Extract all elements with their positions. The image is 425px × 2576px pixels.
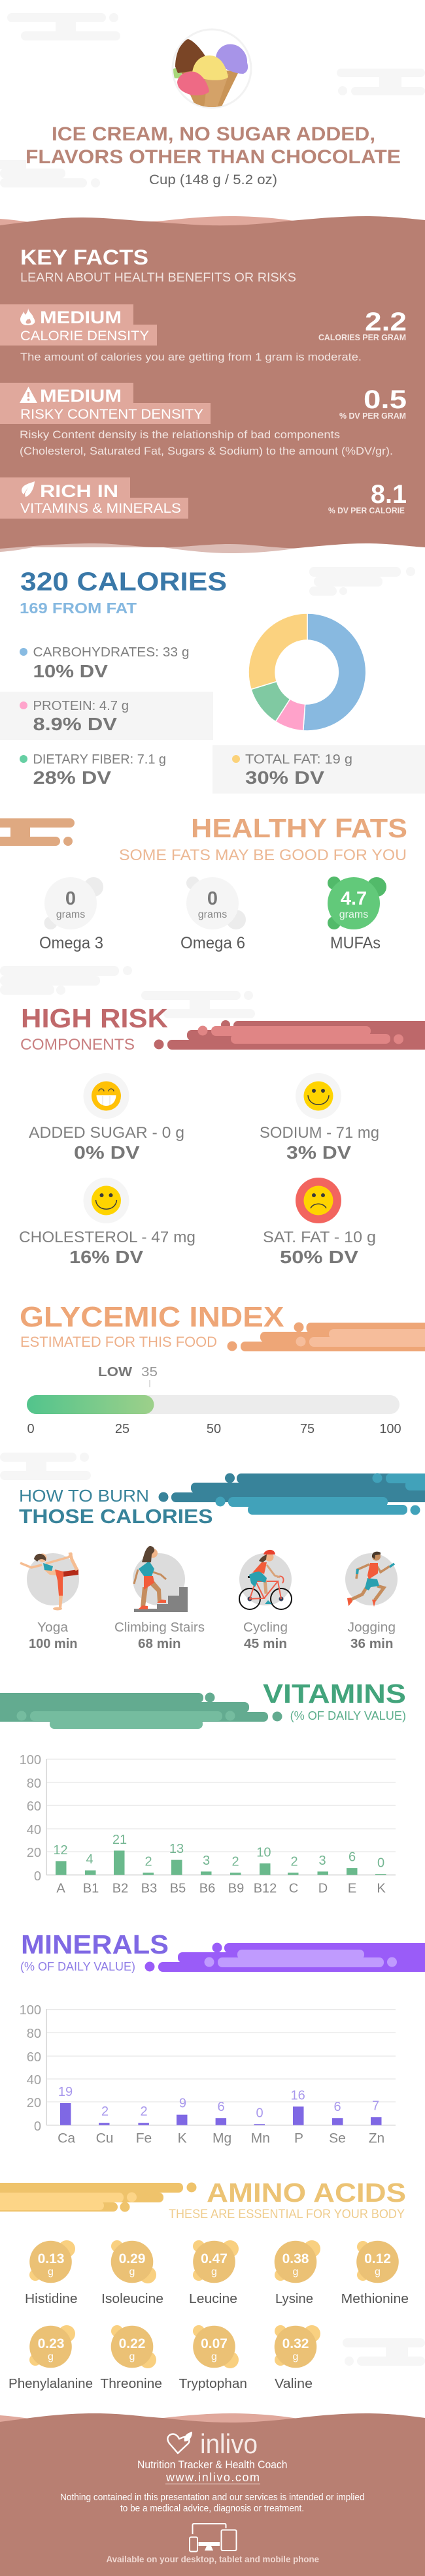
macro: dietary fiber: 28% DV — [33, 767, 111, 788]
exercise: climbing stairs — [114, 1546, 205, 1651]
bar chart: vitamins: B6 — [199, 1882, 215, 1896]
gauge: glycemic index bar: 0 — [27, 1422, 35, 1436]
metric: dv per gram: % DV PER GRAM — [339, 411, 406, 421]
description: risky content: Risky Content density is the relationship of bad components — [20, 428, 340, 441]
amino: phenylalanine — [8, 2325, 93, 2391]
exercise: jogging — [345, 1552, 398, 1651]
bar chart: vitamins: 40 — [27, 1823, 41, 1837]
amino: leucine: 0.47 — [201, 2251, 228, 2266]
icon: glycemic cloud — [228, 1322, 425, 1351]
heading: vitamins: VITAMINS — [263, 1679, 406, 1709]
bar chart: minerals: 9 — [179, 2097, 186, 2111]
amino: lysine — [275, 2240, 320, 2306]
bar chart: vitamins: B12 — [254, 1882, 277, 1896]
macro: total fat — [212, 745, 425, 794]
heading: glycemic index: GLYCEMIC INDEX — [20, 1301, 284, 1333]
amino: histidine: g — [48, 2266, 54, 2278]
bar chart: vitamins: B9 — [228, 1882, 244, 1896]
exercise: cycling: Cycling — [243, 1620, 288, 1635]
bar chart: vitamins: 100 — [20, 1753, 41, 1767]
bar chart: vitamins: 3 — [203, 1854, 210, 1868]
icon: minerals cloud — [145, 1942, 425, 1972]
amino: methionine — [341, 2241, 409, 2306]
badge: vitamins and minerals: VITAMINS & MINERALS — [20, 501, 181, 516]
badge: vitamins and minerals — [0, 477, 188, 519]
description: risky content — [20, 428, 393, 457]
component: added sugar — [29, 1073, 184, 1163]
badge: risky content density: RISKY CONTENT DENSITY — [20, 407, 203, 422]
icon: sad face — [303, 1186, 333, 1215]
component: added sugar: ADDED SUGAR - 0 g — [29, 1124, 184, 1142]
icon: grinning face — [92, 1082, 121, 1110]
amino: histidine: 0.13 — [38, 2251, 64, 2266]
fat: omega 6 — [180, 877, 246, 952]
gauge: glycemic index bar: 35 — [141, 1365, 158, 1379]
bar chart: vitamins: E — [348, 1882, 356, 1896]
amino: methionine: 0.12 — [364, 2251, 391, 2266]
website link: www.inlivo.com — [165, 2471, 260, 2484]
heading: healthy fats: HEALTHY FATS — [191, 813, 407, 843]
disclaimer: to be a medical advice, diagnosis or treatment. — [120, 2504, 304, 2514]
fat: omega 3: 0 — [65, 888, 76, 909]
amino: isoleucine — [101, 2240, 163, 2306]
bar chart: vitamins: 4 — [86, 1852, 94, 1867]
macro: protein: PROTEIN: 4.7 g — [33, 699, 129, 713]
bar chart: minerals: 6 — [217, 2100, 225, 2114]
amino: leucine — [189, 2240, 239, 2306]
amino: isoleucine: 0.29 — [119, 2251, 145, 2266]
subheading: vitamins daily value: (% OF DAILY VALUE) — [290, 1709, 406, 1722]
gauge: glycemic index bar: 50 — [207, 1422, 221, 1436]
amino: threonine — [100, 2325, 162, 2391]
icon: smiling face — [303, 1082, 333, 1110]
bar chart: minerals: Cu — [96, 2131, 113, 2146]
amino: histidine: Histidine — [25, 2292, 77, 2306]
bar chart: vitamins: 10 — [256, 1846, 271, 1860]
amino: leucine: Leucine — [189, 2292, 237, 2306]
component: cholesterol: 16% DV — [69, 1247, 143, 1267]
bar chart: vitamins: C — [289, 1882, 298, 1896]
subheading: components: COMPONENTS — [20, 1036, 135, 1054]
amino: tryptophan — [179, 2325, 247, 2391]
bar chart: vitamins: B3 — [141, 1882, 157, 1896]
heading: amino acids: AMINO ACIDS — [207, 2178, 406, 2208]
icon: devices — [190, 2524, 237, 2551]
subheading: minerals daily value: (% OF DAILY VALUE) — [20, 1960, 135, 1973]
disclaimer — [60, 2492, 365, 2514]
bar chart: vitamins: B5 — [170, 1882, 186, 1896]
bar chart: minerals: 6 — [333, 2100, 341, 2114]
fat: omega 6: 0 — [207, 888, 218, 909]
icon: leaf — [22, 481, 35, 497]
heading: how to burn those calories: HOW TO BURN — [19, 1486, 149, 1505]
amino: methionine: Methionine — [341, 2292, 409, 2306]
icon: high risk cloud — [154, 1020, 425, 1050]
bar chart: vitamins: 2 — [231, 1855, 239, 1869]
bar chart: vitamins: 20 — [27, 1846, 41, 1860]
metric: dv per calorie — [328, 480, 407, 515]
metric: dv per gram: 0.5 — [364, 385, 407, 414]
bar chart: minerals: 40 — [27, 2073, 41, 2087]
bar chart: minerals: 20 — [27, 2096, 41, 2110]
bar chart: minerals: Mg — [212, 2131, 231, 2146]
subheading: amino acids: THESE ARE ESSENTIAL FOR YOUR BODY — [169, 2208, 405, 2221]
donut chart — [248, 613, 366, 731]
component: sodium: SODIUM - 71 mg — [260, 1124, 379, 1142]
amino: threonine: g — [129, 2351, 135, 2362]
fat: omega 3 — [39, 877, 103, 952]
bar chart: vitamins: A — [56, 1882, 65, 1896]
bar chart: minerals — [20, 2003, 396, 2146]
macro: carbohydrates — [20, 645, 190, 681]
amino: threonine: 0.22 — [119, 2336, 145, 2351]
bar chart: vitamins: 21 — [112, 1833, 127, 1847]
icon: yoga figure — [20, 1553, 78, 1611]
bar chart: minerals: 2 — [140, 2104, 148, 2119]
tagline: Nutrition Tracker & Health Coach — [137, 2458, 288, 2471]
heading: how to burn those calories: THOSE CALORIES — [19, 1505, 213, 1528]
fat: omega 6: grams — [198, 909, 227, 920]
bar chart: vitamins: 12 — [53, 1843, 68, 1858]
heading: how to burn those calories — [19, 1486, 213, 1528]
macro: carbohydrates: 10% DV — [33, 661, 108, 681]
bar chart: vitamins: 0 — [34, 1869, 41, 1884]
fat: omega 3: Omega 3 — [39, 934, 103, 952]
component: cholesterol — [19, 1178, 196, 1267]
amino: lysine: g — [293, 2266, 298, 2278]
exercise: jogging: Jogging — [348, 1620, 396, 1635]
amino: methionine: g — [375, 2266, 381, 2278]
amino: threonine: Threonine — [100, 2377, 162, 2391]
amino: phenylalanine: g — [48, 2351, 54, 2362]
bar chart: minerals: 2 — [101, 2104, 109, 2119]
bar chart: vitamins: B1 — [83, 1882, 99, 1896]
amino: leucine: g — [211, 2266, 217, 2278]
gauge: glycemic index bar: LOW — [98, 1365, 132, 1379]
bar chart: minerals: Ca — [58, 2131, 75, 2146]
gauge: glycemic index bar: 25 — [115, 1422, 129, 1436]
metric: dv per calorie: 8.1 — [371, 480, 407, 509]
macro: dietary fiber: DIETARY FIBER: 7.1 g — [33, 752, 166, 767]
fat: mufas: grams — [339, 909, 368, 920]
heading: minerals: MINERALS — [21, 1929, 169, 1959]
exercise: cycling: 45 min — [244, 1637, 287, 1651]
bar chart: minerals: 80 — [27, 2027, 41, 2041]
macro: carbohydrates: CARBOHYDRATES: 33 g — [33, 645, 190, 660]
metric: calories per gram — [318, 308, 407, 342]
bar chart: minerals: Mn — [251, 2131, 270, 2146]
icon: cycling figure — [239, 1550, 292, 1609]
subheading: from fat: 169 FROM FAT — [20, 600, 137, 617]
exercise: jogging: 36 min — [350, 1637, 394, 1651]
heading: key facts: KEY FACTS — [20, 246, 148, 269]
title — [26, 123, 401, 168]
component: sodium — [260, 1073, 379, 1163]
amino: valine: 0.32 — [282, 2336, 309, 2351]
amino: phenylalanine: Phenylalanine — [8, 2377, 93, 2391]
heading: calories: 320 CALORIES — [20, 568, 227, 596]
icon: smiling face — [92, 1186, 121, 1215]
amino: valine — [275, 2325, 320, 2391]
amino: histidine — [25, 2240, 77, 2306]
amino: phenylalanine: 0.23 — [38, 2336, 64, 2351]
macro: protein — [0, 692, 213, 740]
amino: lysine: Lysine — [275, 2292, 313, 2306]
icon: burn calories cloud — [158, 1473, 425, 1515]
bar chart: vitamins: 3 — [318, 1854, 326, 1868]
bar chart: vitamins: B2 — [112, 1882, 128, 1896]
panel: key facts — [0, 216, 425, 553]
exercise: yoga: 100 min — [29, 1637, 77, 1651]
bar chart: minerals: K — [178, 2131, 187, 2146]
fat: omega 6: Omega 6 — [180, 934, 245, 952]
icon: amino acids cloud — [0, 2183, 196, 2212]
bar chart: minerals: 16 — [290, 2088, 305, 2102]
badge: calorie density: MEDIUM — [40, 308, 122, 327]
icon: vitamins cloud — [0, 1693, 282, 1729]
metric: calories per gram: CALORIES PER GRAM — [318, 332, 406, 342]
exercise: yoga: Yoga — [37, 1620, 69, 1635]
macro: protein: 8.9% DV — [33, 714, 117, 734]
panel: footer — [0, 2413, 425, 2576]
badge: calorie density — [0, 304, 157, 346]
component: sodium: 3% DV — [286, 1142, 351, 1163]
bar chart: minerals: 7 — [372, 2099, 379, 2113]
exercise: climbing stairs: Climbing Stairs — [114, 1620, 205, 1635]
bar chart: vitamins: 2 — [144, 1855, 152, 1869]
logo: inlivo: inlivo — [200, 2428, 258, 2459]
component: added sugar: 0% DV — [74, 1142, 140, 1163]
icon: stairs figure — [134, 1546, 188, 1612]
disclaimer: Nothing contained in this presentation and our services is intended or implied — [60, 2492, 365, 2503]
serving size: Cup (148 g / 5.2 oz) — [149, 172, 277, 187]
exercise: climbing stairs: 68 min — [138, 1637, 180, 1651]
description: calorie density: The amount of calories you are getting from 1 gram is moderate. — [20, 351, 362, 363]
amino: tryptophan: 0.07 — [201, 2336, 228, 2351]
amino: lysine: 0.38 — [282, 2251, 309, 2266]
bar chart: minerals: Fe — [136, 2131, 152, 2146]
bar chart: minerals: 100 — [20, 2003, 41, 2018]
amino: tryptophan: g — [211, 2351, 217, 2362]
bar chart: vitamins: 60 — [27, 1799, 41, 1814]
bar chart: vitamins: 0 — [377, 1856, 384, 1871]
amino: valine: Valine — [275, 2377, 313, 2391]
metric: calories per gram: 2.2 — [365, 308, 407, 336]
bar chart: minerals: 0 — [256, 2106, 264, 2121]
fat: mufas: 4.7 — [341, 888, 367, 909]
bar chart: minerals: P — [294, 2131, 303, 2146]
heading: high risk: HIGH RISK — [21, 1003, 168, 1033]
icon: jogging figure — [347, 1552, 394, 1607]
icon: warning triangle — [20, 387, 37, 403]
gauge: glycemic index bar: 100 — [379, 1422, 401, 1436]
bar chart: vitamins: D — [318, 1882, 328, 1896]
metric: dv per gram — [339, 385, 407, 421]
bar chart: minerals: Se — [329, 2131, 346, 2146]
bar chart: vitamins: K — [377, 1882, 386, 1896]
bar chart: minerals: 60 — [27, 2050, 41, 2065]
component: saturated fat: SAT. FAT - 10 g — [263, 1229, 376, 1246]
amino: valine: g — [293, 2351, 298, 2362]
macro: dietary fiber — [20, 752, 166, 788]
bar chart: vitamins: 2 — [290, 1855, 298, 1869]
title: ICE CREAM, NO SUGAR ADDED, — [52, 123, 375, 145]
exercise: cycling — [239, 1550, 292, 1651]
fat: omega 3: grams — [56, 909, 85, 920]
metric: dv per calorie: % DV PER CALORIE — [328, 506, 405, 515]
icon: healthy fats cloud — [0, 818, 75, 846]
subheading: glycemic index: ESTIMATED FOR THIS FOOD — [20, 1334, 217, 1350]
fat: mufas — [328, 877, 386, 952]
logo: inlivo — [167, 2428, 258, 2459]
availability note: Available on your desktop, tablet and mobile phone — [106, 2554, 319, 2564]
bar chart: vitamins: 80 — [27, 1777, 41, 1791]
badge: calorie density: CALORIE DENSITY — [20, 329, 149, 344]
amino: isoleucine: g — [129, 2266, 135, 2278]
bar chart: minerals: 19 — [58, 2085, 73, 2099]
exercise: yoga — [20, 1553, 79, 1651]
bar chart: vitamins — [20, 1753, 396, 1896]
gauge: glycemic index bar — [27, 1365, 401, 1436]
subheading: LEARN ABOUT HEALTH BENEFITS OR RISKS — [20, 271, 296, 285]
gauge: glycemic index bar: 75 — [300, 1422, 314, 1436]
badge: risky content density — [0, 383, 211, 424]
bar chart: minerals: 0 — [34, 2119, 41, 2134]
amino: isoleucine: Isoleucine — [101, 2292, 163, 2306]
bar chart: vitamins: 13 — [169, 1842, 184, 1856]
badge: vitamins and minerals: RICH IN — [40, 481, 118, 501]
description: risky content: (Cholesterol, Saturated Fat, Sugars & Sodium) to the amount (%DV/gr). — [20, 445, 393, 457]
component: saturated fat: 50% DV — [280, 1247, 358, 1267]
bar chart: vitamins: 6 — [348, 1850, 356, 1865]
macro: total fat: TOTAL FAT: 19 g — [245, 752, 352, 767]
fat: mufas: MUFAs — [330, 934, 381, 952]
subheading: healthy fats: SOME FATS MAY BE GOOD FOR YOU — [119, 846, 407, 864]
bar chart: minerals: Zn — [369, 2131, 384, 2146]
title: FLAVORS OTHER THAN CHOCOLATE — [26, 146, 401, 168]
food image: ice cream cones — [171, 29, 251, 108]
macro: total fat: 30% DV — [245, 767, 324, 788]
icon: flame — [20, 308, 35, 325]
badge: risky content density: MEDIUM — [40, 386, 122, 406]
amino: tryptophan: Tryptophan — [179, 2377, 247, 2391]
component: cholesterol: CHOLESTEROL - 47 mg — [19, 1229, 196, 1246]
component: saturated fat — [263, 1178, 376, 1267]
